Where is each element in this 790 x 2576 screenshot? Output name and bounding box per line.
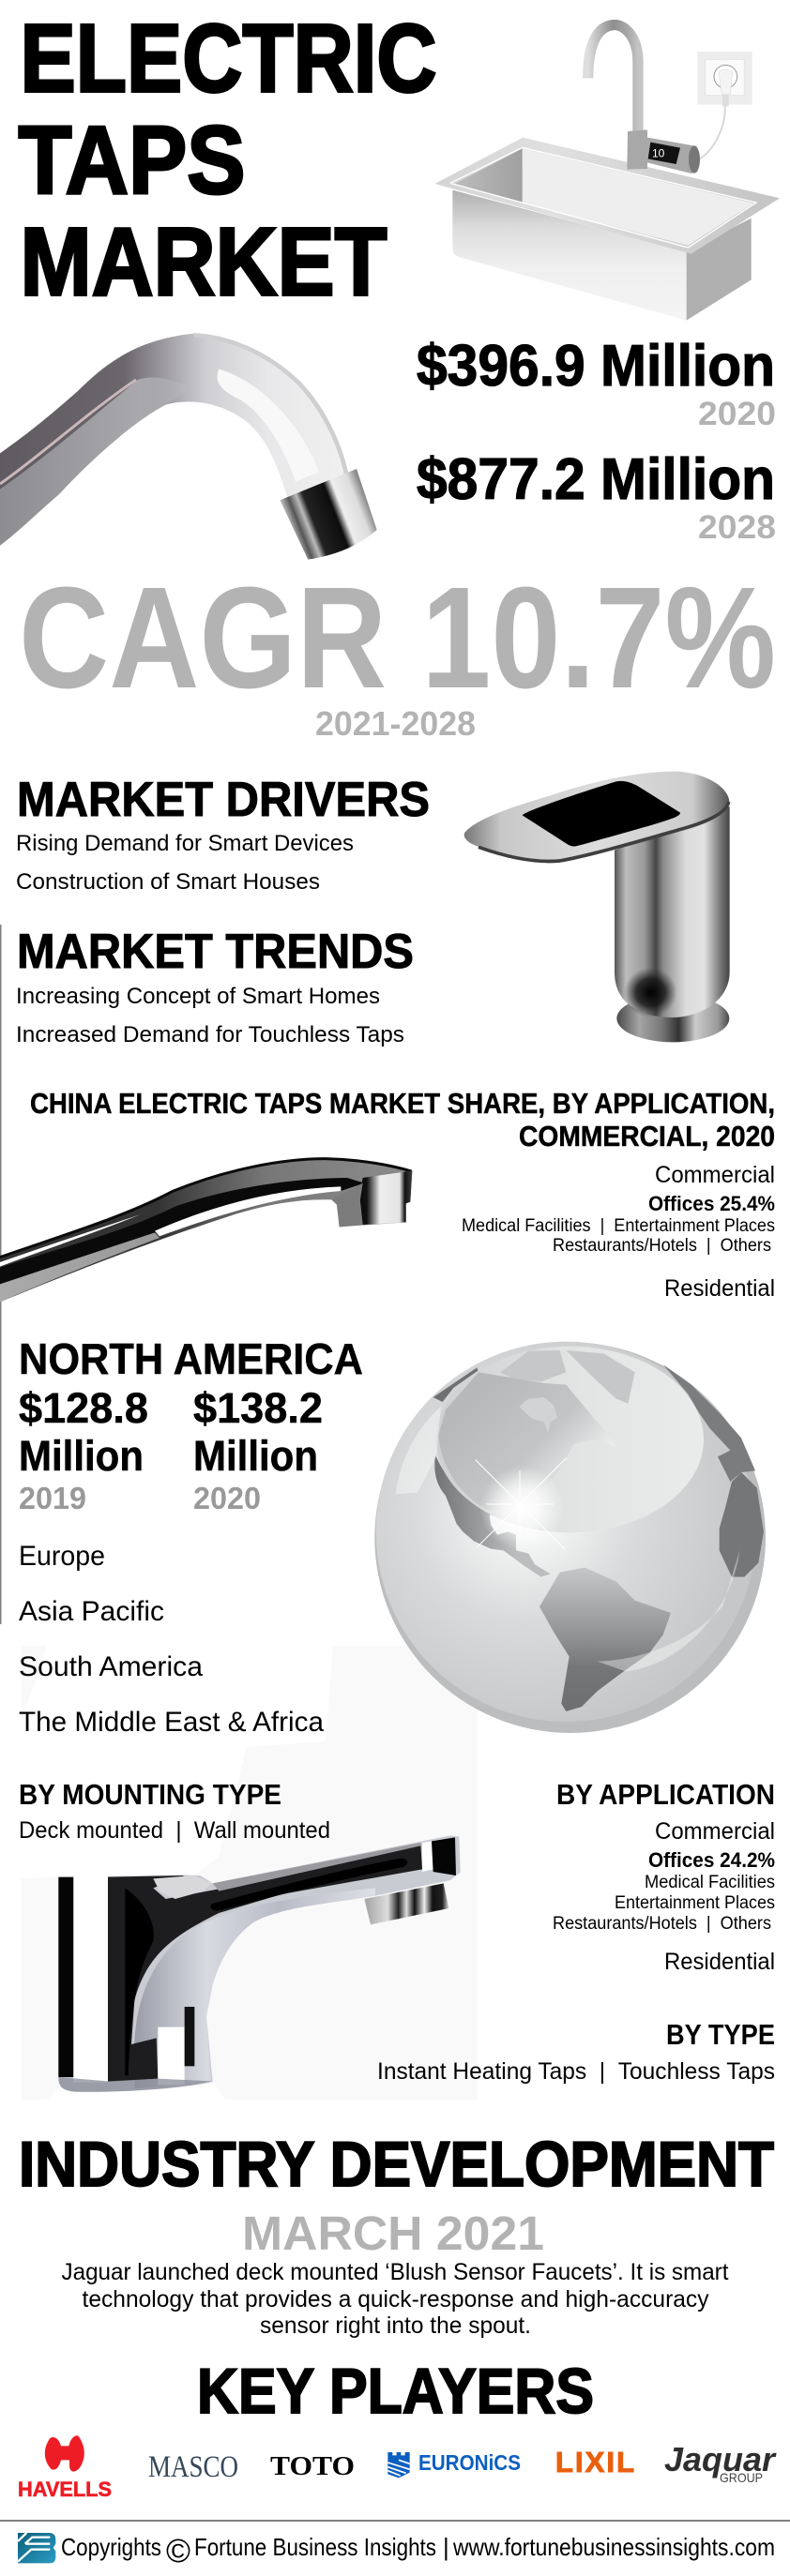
- North America: [19, 1334, 363, 1515]
- Hudson Bay: [519, 1397, 557, 1433]
- faucet silhouette: [58, 1835, 461, 2092]
- market value 2020: [417, 334, 776, 432]
- title line 3: MARKET: [21, 208, 387, 315]
- spout lower grey: [0, 1232, 160, 1302]
- sink left wall: [453, 148, 523, 203]
- logo: Euronics: [387, 2450, 521, 2478]
- illustration: sensor faucet with black panel: [464, 772, 730, 1042]
- China market share: [30, 1087, 775, 1302]
- left reflection: [396, 1407, 441, 1494]
- South America landmass: [539, 1568, 671, 1711]
- residential label: Residential: [664, 1275, 775, 1302]
- spout top edge: [0, 1159, 412, 1258]
- logo: Toto: TOTO: [270, 2451, 355, 2481]
- sparkle: [476, 1458, 566, 1549]
- cylinder white stripe: [73, 1876, 108, 2083]
- mounting heading: BY MOUNTING TYPE: [19, 1778, 281, 1811]
- tap display: 10: [652, 146, 665, 159]
- development text 1: Jaguar launched deck mounted ‘Blush Sensor Faucets’. It is smart: [62, 2259, 729, 2285]
- tap display: [648, 143, 680, 164]
- South America: South America: [19, 1651, 203, 1682]
- by mounting type: [19, 1778, 330, 1844]
- trend 1: Increasing Concept of Smart Homes: [16, 984, 380, 1009]
- logo: Lixil: LIXIL: [555, 2446, 634, 2478]
- key players heading: KEY PLAYERS: [197, 2356, 594, 2427]
- year 2028: 2028: [698, 509, 776, 546]
- entertainment places: Entertainment Places: [615, 1893, 775, 1913]
- Alaska edge: [433, 1367, 478, 1402]
- spout white highlight: [155, 1186, 341, 1236]
- Africa landmass: [720, 1472, 764, 1577]
- faucet base: [616, 995, 729, 1042]
- silver spout top: [213, 1843, 420, 1891]
- illustration: white curved spout: [0, 334, 377, 560]
- spout outer shading: [194, 335, 346, 475]
- drivers heading: MARKET DRIVERS: [17, 773, 430, 827]
- sub-segments 2: Restaurants/Hotels | Others: [553, 1236, 771, 1256]
- cylinder black stripe: [58, 1877, 73, 2077]
- Euronics shield: [387, 2452, 410, 2478]
- faucet foot band: [58, 2077, 213, 2092]
- footer: [18, 2533, 775, 2569]
- black spout reflection: [210, 1859, 407, 1910]
- faucet top: [464, 772, 729, 863]
- head black block: [432, 1837, 456, 1876]
- driver 1: Rising Demand for Smart Devices: [16, 831, 354, 856]
- power cord: [699, 106, 725, 159]
- type heading: BY TYPE: [666, 2018, 775, 2051]
- light glow: [480, 1466, 565, 1550]
- Jaquar group: GROUP: [720, 2470, 763, 2485]
- offices share: Offices 24.2%: [648, 1848, 775, 1872]
- faucet body: [615, 806, 730, 1017]
- by application: [553, 1778, 775, 1975]
- other regions: [19, 1541, 324, 1738]
- copyright symbol: ©: [166, 2533, 190, 2569]
- tap body: [627, 129, 697, 173]
- separator: |: [443, 2533, 449, 2561]
- year 2020: 2020: [193, 1481, 261, 1515]
- spout left highlight: [0, 1214, 141, 1267]
- medical facilities: Medical Facilities: [645, 1873, 775, 1892]
- footer rule: [0, 2520, 790, 2522]
- illustration: sink with electric tap and socket: [434, 25, 780, 321]
- market drivers: [16, 773, 430, 895]
- value 2019: $128.8: [19, 1384, 148, 1432]
- sink inner edge: [450, 147, 756, 248]
- commercial label: Commercial: [655, 1162, 775, 1188]
- dark faucet body: [108, 1845, 422, 2082]
- development text 3: sensor right into the spout.: [260, 2312, 531, 2339]
- Arctic islands: [500, 1350, 566, 1381]
- dark lower stripe: [185, 2007, 194, 2066]
- logo: Masco: MASCO: [148, 2450, 238, 2484]
- sensor panel: [523, 781, 680, 847]
- mounting options: Deck mounted | Wall mounted: [19, 1817, 330, 1844]
- copyright words: Copyrights: [61, 2533, 161, 2561]
- lower spout silver: [134, 1888, 375, 2088]
- sink interior: [523, 148, 753, 246]
- faucet body shadow: [624, 968, 677, 1017]
- illustration: chrome spout: [0, 1158, 412, 1302]
- development date: MARCH 2021: [242, 2207, 544, 2260]
- globe sphere: [376, 1342, 756, 1722]
- head white stripe: [422, 1841, 433, 1872]
- spout head: [359, 1170, 412, 1225]
- company name: Fortune Business Insights: [194, 2533, 436, 2561]
- spout highlight: [0, 380, 136, 484]
- region heading: NORTH AMERICA: [19, 1334, 363, 1383]
- market value 2028: [417, 447, 776, 546]
- trend 2: Increased Demand for Touchless Taps: [16, 1022, 404, 1047]
- type options: Instant Heating Taps | Touchless Taps: [377, 2058, 775, 2085]
- title line 2: TAPS: [19, 106, 246, 214]
- sub-segments 1: Medical Facilities | Entertainment Places: [462, 1216, 775, 1236]
- sink front face: [452, 190, 687, 321]
- commercial label: Commercial: [655, 1818, 775, 1845]
- Mexico landmass: [434, 1455, 551, 1577]
- year 2019: 2019: [19, 1481, 86, 1515]
- offices share: Offices 25.4%: [648, 1192, 775, 1215]
- Middle East and Africa: The Middle East & Africa: [19, 1707, 324, 1738]
- illustration: chrome deck-mounted faucet: [58, 1835, 461, 2092]
- spout tube: [0, 334, 349, 546]
- left edge rule: [0, 925, 2, 1624]
- white lower stripe: [158, 2027, 185, 2085]
- value 396.9: $396.9 Million: [417, 334, 775, 399]
- trends heading: MARKET TRENDS: [17, 925, 414, 979]
- chrome top highlight: [153, 1876, 213, 1899]
- spout aerator: [331, 1183, 363, 1227]
- Europe: Europe: [19, 1541, 105, 1572]
- market trends: [16, 925, 414, 1047]
- Havells emblem: [45, 2435, 84, 2472]
- tap end cap: [689, 145, 700, 173]
- wall socket: [697, 52, 752, 106]
- spout inner body highlight: [218, 369, 319, 481]
- North America landmass: [438, 1372, 616, 1516]
- Havells name: HAVELLS: [18, 2478, 112, 2501]
- aerator: [364, 1883, 448, 1924]
- black body reflection: [125, 1888, 154, 2075]
- Greenland: [566, 1350, 635, 1404]
- by type: [377, 2018, 775, 2085]
- value 877.2: $877.2 Million: [417, 447, 775, 512]
- Fortune Business Insights logo: [18, 2533, 55, 2563]
- Euronics name: EURONiCS: [418, 2450, 521, 2475]
- spout silhouette: [0, 1158, 412, 1302]
- illustration: globe: [374, 1342, 766, 1733]
- driver 2: Construction of Smart Houses: [16, 869, 320, 895]
- logo: Havells: [18, 2435, 112, 2501]
- tap arch: [588, 25, 638, 133]
- Europe landmass: [663, 1364, 755, 1482]
- CAGR: [19, 557, 776, 743]
- globe outer ring: [374, 1342, 766, 1733]
- restaurants and others: Restaurants/Hotels | Others: [553, 1914, 771, 1934]
- value 2020: $138.2: [193, 1384, 323, 1432]
- pale background shape behind mounting faucet: [22, 1646, 478, 2100]
- Asia Pacific: Asia Pacific: [19, 1596, 164, 1627]
- sink side face: [687, 218, 752, 321]
- residential label: Residential: [664, 1949, 775, 1975]
- spout dark band: [0, 1178, 364, 1285]
- industry development: [19, 2129, 774, 2339]
- logo: Jaquar: [664, 2440, 777, 2485]
- development text 2: technology that provides a quick-response and high-accuracy: [83, 2286, 709, 2312]
- CAGR period: 2021-2028: [315, 704, 476, 743]
- unit 2019: Million: [19, 1432, 144, 1480]
- chrome nozzle: [280, 469, 377, 560]
- unit 2020: Million: [193, 1432, 318, 1480]
- sink rim: [434, 138, 780, 254]
- title line 1: ELECTRIC: [21, 4, 437, 113]
- Jaquar name: Jaquar: [664, 2440, 777, 2478]
- lower reflection: [598, 1550, 739, 1671]
- spout lower shading: [0, 378, 194, 546]
- year 2020: 2020: [698, 396, 776, 432]
- glass cap: [436, 1347, 704, 1532]
- faucet lip: [479, 802, 729, 861]
- title: [19, 4, 437, 315]
